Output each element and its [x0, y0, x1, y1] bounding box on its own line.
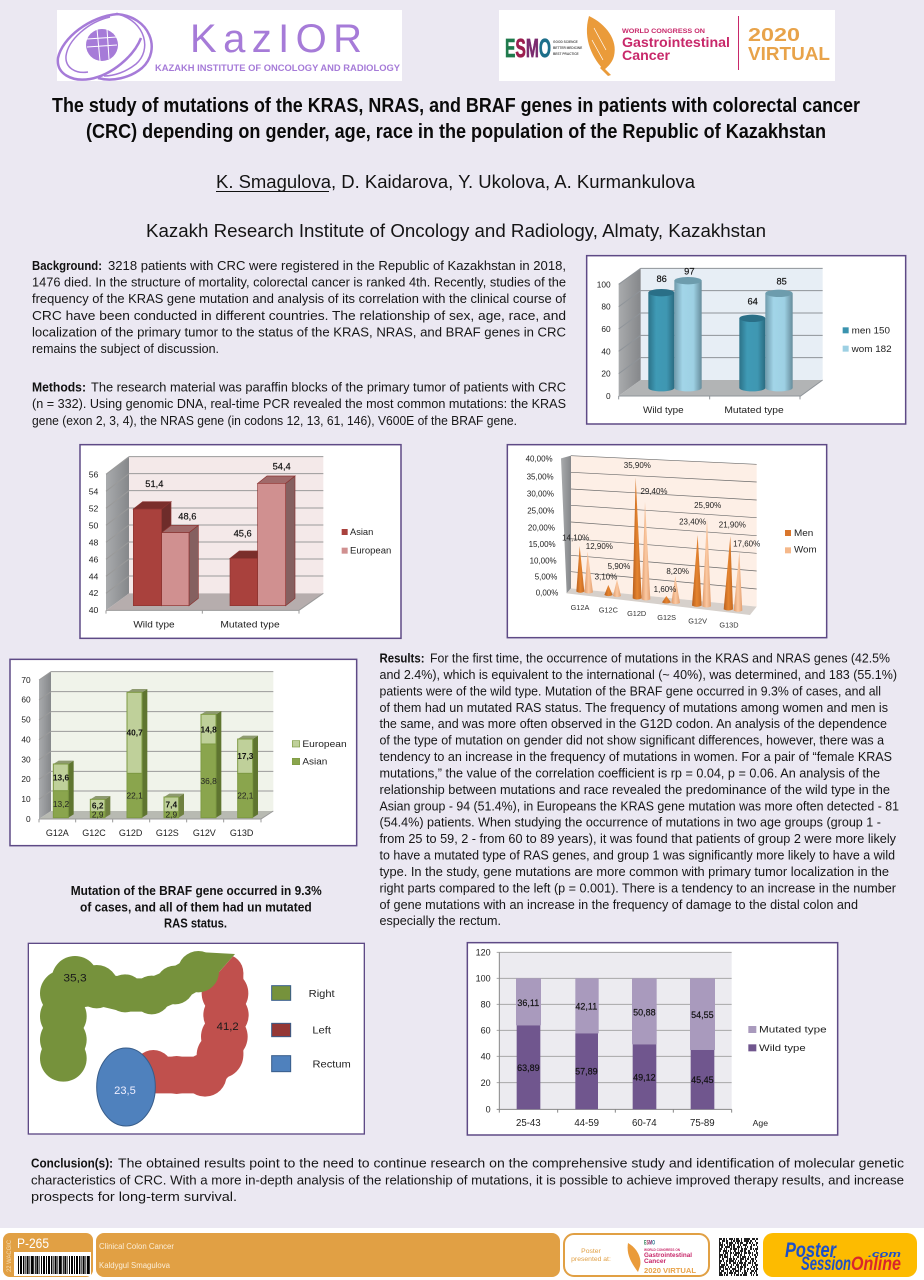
- text block: methods: (n = 332). Using genomic DNA, real-time PCR revealed the most common mutations: the KRAS: [32, 396, 566, 411]
- category labels: Age: [753, 1118, 768, 1128]
- axis labels: 0: [26, 814, 31, 824]
- category labels: 75-89: [690, 1118, 715, 1129]
- axis labels: 40: [89, 605, 99, 615]
- text block: methods: Methods:: [32, 380, 86, 394]
- text block: methods: gene (exon 2, 3, 4), the NRAS gene (in codons 12, 13, 61, 146), V600E of the BRAF gene.: [32, 413, 517, 428]
- poster presented at badge: ESMO: [644, 1240, 655, 1246]
- text block: results: and 2.4%), which is equivalent to the international (~ 40%), was determined, and 183 (55.1%): [380, 667, 897, 682]
- value labels: 2,9: [92, 809, 104, 819]
- text block: results: from 25 to 59, 2 - from 60 to 89 years), it was found that patients of group 2 were more likely: [380, 831, 896, 846]
- axis labels: 60: [21, 695, 31, 705]
- axis labels: 70: [21, 675, 31, 685]
- text block: background: 1476 died. In the structure of mortality, colorectal cancer is ranked 4th. Recently, studies of the: [32, 275, 566, 290]
- text block: results: (54.4%) patients. When studying the occurrence of mutations in two age groups (group 1 -: [380, 815, 881, 830]
- poster presented at badge: WORLD CONGRESS ON: [644, 1248, 681, 1252]
- value labels: 23,5: [114, 1085, 136, 1097]
- axis labels: 60: [481, 1026, 491, 1036]
- category labels: [46, 828, 254, 838]
- category labels: G13D: [719, 621, 739, 630]
- value labels: 22,1: [237, 790, 254, 800]
- legend: [292, 739, 347, 767]
- axis labels: 56: [89, 470, 99, 480]
- PosterSessionOnline logo: .com: [868, 1249, 901, 1259]
- value labels: 17,60%: [733, 539, 760, 548]
- value labels: 45,45: [691, 1075, 714, 1085]
- caption: BRAF mutation: RAS status.: [164, 916, 227, 931]
- text block: methods: The research material was paraffin blocks of the primary tumor of patients with CRC: [91, 380, 566, 394]
- colon: right section (green): [40, 951, 235, 1082]
- axis labels: 80: [481, 1000, 491, 1010]
- axis labels: 0: [606, 391, 611, 401]
- poster presented at badge: [564, 1234, 709, 1276]
- text block: results: of them had un mutated RAS status. The frequency of mutations among women and men is: [380, 700, 888, 715]
- title: (CRC) depending on gender, age, race in the population of the Republic of Kazakhstan: [86, 121, 826, 143]
- value labels: 50,88: [633, 1007, 656, 1017]
- value labels: 49,12: [633, 1072, 656, 1082]
- axis labels: 52: [89, 503, 99, 513]
- text block: conclusion: characteristics of CRC. With a more in-depth analysis of the relationship of mutations, it is possible to achieve improved therapy results, and increase: [31, 1172, 904, 1187]
- value labels: 48,6: [178, 511, 196, 521]
- value labels: 8,20%: [666, 567, 689, 576]
- axis labels: 40: [601, 346, 611, 356]
- value labels: 51,4: [145, 479, 163, 489]
- legend: Men: [794, 528, 813, 538]
- axis labels: 40: [481, 1052, 491, 1062]
- text block: background: 3218 patients with CRC were registered in the Republic of Kazakhstan in 2018,: [108, 258, 566, 273]
- category labels: [516, 1118, 768, 1129]
- value labels: 85: [776, 277, 787, 287]
- value labels: [656, 266, 787, 307]
- legend: Asian: [350, 527, 373, 537]
- legend: [748, 1025, 827, 1053]
- logo: ESMO World Congress: Cancer: [622, 47, 671, 63]
- axis labels: 20: [601, 369, 611, 379]
- text block: background: CRC have been conducted in different countries. The relationship of sex, age, race, and: [32, 308, 566, 323]
- category labels: [571, 603, 739, 630]
- category labels: G12A: [571, 603, 589, 612]
- value labels european: 7,4: [166, 800, 177, 810]
- chart: mutation type by age: [467, 943, 838, 1135]
- legend: Wild type: [759, 1043, 806, 1053]
- category labels: Mutated type: [220, 619, 280, 629]
- axis labels: 80: [601, 302, 611, 312]
- PosterSessionOnline logo: [763, 1233, 917, 1277]
- value labels: 45,6: [234, 529, 252, 539]
- category labels: [643, 405, 784, 415]
- value labels: [562, 461, 760, 594]
- value labels: 13,2: [53, 799, 69, 809]
- value labels: 25,90%: [694, 501, 721, 510]
- axis labels: [597, 279, 611, 401]
- value labels: 86: [656, 274, 667, 284]
- value labels: 64: [747, 297, 758, 307]
- affiliation: Kazakh Research Institute of Oncology and Radiology, Almaty, Kazakhstan: [146, 220, 766, 241]
- colon: left section (red): [134, 954, 249, 1097]
- category labels: Wild type: [133, 619, 175, 629]
- text block: results: right parts compared to the left (p = 0.001). There is a tendency to an increase in the number: [380, 880, 897, 895]
- text block: results: especially the rectum.: [380, 913, 501, 928]
- text block: results: patients were of the wild type. Mutation of the BRAF gene occurred in 9.3% of cases, and all: [380, 683, 881, 698]
- chart: wild/mutated by race: [80, 445, 401, 638]
- chart: wild/mutated by gender: [587, 256, 906, 424]
- text block: background: frequency of the KRAS gene mutation and analysis of its correlation with the clinical course of: [32, 291, 566, 306]
- text block: conclusion: The obtained results point to the need to continue research on the comprehensive study and identification of molecular genetic: [118, 1156, 905, 1170]
- value labels european: 6,2: [92, 800, 104, 810]
- legend: Mutated type: [759, 1025, 827, 1035]
- value labels: 42,11: [575, 1001, 597, 1011]
- axis labels: 50: [89, 520, 99, 530]
- text block: background: localization of the primary tumor to the status of the KRAS, NRAS, and BRAF genes in CRC: [32, 324, 566, 339]
- rectum ellipse: [97, 1048, 155, 1126]
- footer band: [0, 1228, 924, 1280]
- value labels european: 40,7: [127, 728, 143, 738]
- PosterSessionOnline logo: Session: [801, 1254, 851, 1275]
- text block: conclusion: Conclusion(s):: [31, 1156, 113, 1170]
- value labels european: [53, 724, 254, 810]
- chart: codon mutations by gender (cones): [507, 445, 827, 638]
- ESMO tagline: BETTER MEDICINE: [553, 46, 582, 50]
- vertical code: 22 WACGIC: [6, 1240, 13, 1272]
- legend: Left: [312, 1025, 331, 1036]
- value labels: 54,55: [691, 1010, 714, 1020]
- axis labels: 50: [21, 715, 31, 725]
- text block: conclusion: [31, 1156, 905, 1204]
- value labels: 35,90%: [624, 461, 651, 470]
- value labels: 36,8: [201, 776, 217, 786]
- value labels european: 14,8: [201, 724, 217, 734]
- text block: results: Results:: [380, 650, 424, 666]
- axis labels: 0,00%: [536, 589, 558, 598]
- value labels: [63, 973, 239, 1097]
- value labels: 14,10%: [562, 534, 589, 543]
- axis labels: 60: [601, 324, 611, 334]
- value labels: [517, 998, 714, 1085]
- value labels: 41,2: [217, 1021, 239, 1033]
- axis labels: 20: [21, 774, 31, 784]
- category labels: 60-74: [632, 1118, 657, 1129]
- axis labels: 120: [476, 947, 491, 957]
- axis labels: 15,00%: [529, 540, 556, 549]
- text block: results: of the type of mutation on gender did not show significant differences, however, there was a: [380, 733, 885, 748]
- text block: background: Background:: [32, 258, 102, 273]
- value labels: 1,60%: [654, 585, 676, 594]
- legend: [785, 528, 817, 555]
- category labels: 44-59: [574, 1118, 599, 1129]
- stacked bars: [516, 978, 715, 1109]
- caption: BRAF mutation: of cases, and all of them had un mutated: [80, 899, 312, 914]
- axis labels: 100: [597, 279, 611, 289]
- poster presented at badge: Gastrointestinal: [644, 1252, 692, 1259]
- axis labels: 40: [21, 734, 31, 744]
- axis labels: 30,00%: [527, 489, 554, 498]
- category labels: G12S: [657, 613, 676, 622]
- category labels: G12C: [82, 828, 106, 838]
- value labels: 5,90%: [608, 562, 630, 571]
- ESMO wordmark: ESMO: [505, 33, 551, 63]
- legend: [272, 986, 351, 1072]
- category labels: G12C: [599, 606, 619, 615]
- value labels: 21,90%: [719, 520, 746, 529]
- text block: results: type. In the study, gene mutations are more common with primary tumor localization in the: [380, 864, 889, 879]
- axis labels: 20,00%: [528, 523, 555, 532]
- axis labels: [89, 470, 99, 615]
- bars: [133, 476, 295, 606]
- text block: results: tendency to an increase in the frequency of mutations in women. For a pair of “female KRAS: [380, 749, 892, 764]
- axis labels: 42: [89, 588, 99, 598]
- legend: European: [350, 546, 391, 556]
- category labels: G12V: [688, 616, 707, 625]
- legend: Asian: [302, 757, 327, 767]
- axis labels: 35,00%: [527, 472, 554, 481]
- text block: results: [380, 650, 899, 928]
- poster number: P-265: [17, 1235, 49, 1251]
- category labels: [133, 619, 280, 629]
- axis labels: 5,00%: [535, 573, 557, 582]
- value labels: 29,40%: [640, 487, 668, 496]
- poster presented at badge: Poster: [581, 1248, 602, 1255]
- legend: European: [302, 739, 347, 749]
- text block: results: to have a mutated type of RAS genes, and group 1 was significantly more likely to have a wild: [380, 848, 895, 863]
- category labels: G12S: [156, 828, 179, 838]
- axis labels: 10,00%: [530, 557, 557, 566]
- value labels: 3,10%: [595, 573, 617, 582]
- axis labels: 0: [486, 1104, 491, 1114]
- session info bar: [96, 1233, 560, 1277]
- session info bar: Kaldygul Smagulova: [99, 1260, 170, 1270]
- category labels: G12D: [119, 828, 143, 838]
- value labels: 23,40%: [679, 518, 706, 527]
- axis labels: [526, 455, 558, 598]
- PosterSessionOnline logo: Poster: [785, 1239, 837, 1262]
- text block: methods: [32, 380, 566, 428]
- category labels: Mutated type: [724, 405, 784, 415]
- axis labels: 40,00%: [526, 455, 553, 464]
- poster presented at badge: Cancer: [644, 1258, 666, 1265]
- icon: wheat: [587, 16, 615, 76]
- axis labels: 100: [476, 974, 491, 984]
- text block: background: remains the subject of discussion.: [32, 341, 219, 356]
- text block: results: For the first time, the occurrence of mutations in the KRAS and NRAS genes (42.5%: [430, 650, 890, 666]
- poster presented at badge: 2020 VIRTUAL: [644, 1266, 696, 1275]
- axis labels: 25,00%: [527, 507, 554, 516]
- PosterSessionOnline logo: Online: [851, 1254, 901, 1275]
- value labels: 12,90%: [586, 542, 613, 551]
- value labels: 2,9: [166, 809, 177, 819]
- text block: results: mutations,” the value of the correlation coefficient is rp = 0.04, p = 0.06. An analysis of the: [380, 765, 880, 780]
- axis labels: [21, 675, 31, 824]
- category labels: 25-43: [516, 1118, 541, 1129]
- axis labels: 44: [89, 571, 99, 581]
- category labels: G12A: [46, 828, 69, 838]
- authors: K. Smagulova, D. Kaidarova, Y. Ukolova, A. Kurmankulova: [216, 171, 696, 192]
- value labels: 63,89: [517, 1063, 540, 1073]
- wordmark: KazIOR: [190, 17, 362, 61]
- poster presented at badge: presented at:: [571, 1256, 611, 1263]
- barcode: [18, 1256, 90, 1274]
- logo: KazIOR: [57, 10, 402, 81]
- category labels: G12D: [627, 609, 646, 618]
- legend: Rectum: [312, 1059, 351, 1070]
- text block: results: of gene mutations with an increase in the frequency of damage to the distal colon and: [380, 897, 858, 912]
- session info bar: Clinical Colon Cancer: [99, 1241, 174, 1251]
- axis labels: 10: [21, 794, 31, 804]
- value labels: [53, 776, 254, 819]
- legend: Right: [309, 989, 335, 1000]
- value labels: 35,3: [63, 973, 87, 985]
- category labels: G12V: [193, 828, 216, 838]
- legend: men 150: [852, 326, 890, 336]
- icon: KazIOR globe swirl: [58, 14, 152, 80]
- legend: [342, 527, 391, 556]
- text block: results: Asian group - 94 (51.4%), in Europeans the KRAS gene mutation was more often detected - 81: [380, 798, 899, 813]
- QR code: [719, 1239, 758, 1275]
- congress name: WORLD CONGRESS ON: [622, 28, 705, 35]
- caption: BRAF mutation: Mutation of the BRAF gene occurred in 9.3%: [71, 883, 322, 898]
- caption: BRAF mutation: [71, 883, 322, 931]
- ESMO tagline: [553, 40, 582, 56]
- axis labels: 20: [481, 1078, 491, 1088]
- value labels: 54,4: [273, 461, 291, 471]
- ESMO tagline: GOOD SCIENCE: [553, 40, 578, 44]
- value labels european: 17,3: [237, 751, 254, 761]
- axis labels: 46: [89, 554, 99, 564]
- ESMO tagline: BEST PRACTICE: [553, 52, 579, 56]
- value labels: 97: [684, 266, 695, 276]
- value labels: 22,1: [127, 790, 143, 800]
- chart: colon tumour localization: [28, 943, 364, 1134]
- cones: [576, 477, 742, 612]
- 2020 virtual: 2020: [748, 25, 800, 45]
- axis labels: [476, 947, 491, 1114]
- stacked bars: [53, 689, 258, 818]
- value labels: 36,11: [517, 998, 539, 1008]
- text block: results: relationship between mutations and race revealed the predominance of the wild type in the: [380, 782, 890, 797]
- bars: [648, 277, 793, 391]
- text block: results: the same, and was more often observed in the G12D codon. An analysis of the dependence: [380, 716, 887, 731]
- institute name: KAZAKH INSTITUTE OF ONCOLOGY AND RADIOLOGY: [155, 63, 400, 73]
- legend: wom 182: [851, 344, 892, 354]
- logo: ESMO World Congress: Gastrointestinal: [622, 34, 730, 50]
- title: [52, 95, 860, 143]
- value labels: 57,89: [575, 1067, 598, 1077]
- category labels: G13D: [230, 828, 254, 838]
- value labels: [145, 461, 291, 539]
- axis labels: 54: [89, 487, 99, 497]
- value labels european: 13,6: [53, 772, 69, 782]
- chart: codon mutations by race (stacked): [10, 659, 357, 846]
- logo: ESMO World Congress: VIRTUAL: [748, 44, 830, 64]
- axis labels: 30: [21, 754, 31, 764]
- poster ID tab: [3, 1233, 93, 1277]
- text block: conclusion: prospects for long-term survival.: [31, 1189, 237, 1204]
- legend: [843, 326, 892, 354]
- category labels: Wild type: [643, 405, 684, 415]
- logo: ESMO World Congress: [499, 10, 835, 81]
- legend: Wom: [794, 545, 817, 555]
- text block: background: [32, 258, 566, 356]
- axis labels: 48: [89, 537, 99, 547]
